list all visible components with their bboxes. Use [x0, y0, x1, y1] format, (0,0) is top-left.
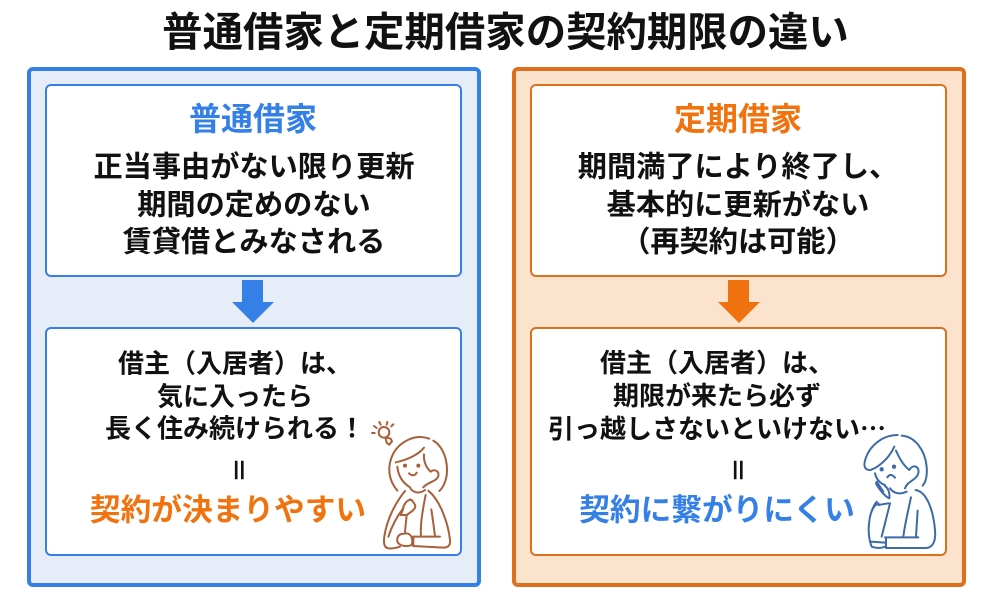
symbol: equals: ＝: [221, 456, 258, 483]
text: ordinary lease conclusion: 契約が決まりやすい: [90, 493, 366, 528]
title: 普通借家と定期借家の契約期限の違い: [162, 8, 849, 54]
text: ordinary lease tenant: 借主（入居者）は、: [118, 348, 352, 378]
text: ordinary lease definition: [93, 151, 415, 259]
text: ordinary lease tenant: [105, 348, 365, 443]
heading: fixed-term lease: 定期借家: [674, 101, 802, 137]
text: fixed-term definition: 基本的に更新がない: [607, 189, 869, 221]
text: fixed-term tenant: 引っ越しさないといけない…: [548, 409, 886, 446]
heading: ordinary lease: 普通借家: [189, 101, 317, 137]
box: ordinary lease definition: [45, 84, 462, 277]
text: ordinary lease tenant: 気に入ったら: [157, 381, 313, 411]
box: ordinary lease result: [45, 327, 462, 556]
text: fixed-term tenant: [548, 348, 886, 446]
text: fixed-term definition: [578, 151, 898, 259]
box: fixed-term definition: [530, 84, 947, 277]
text: fixed-term conclusion: 契約に繋がりにくい: [579, 493, 855, 528]
symbol: equals: ＝: [720, 456, 757, 483]
text: fixed-term tenant: 期限が来たら必ず: [613, 380, 821, 410]
text: ordinary lease definition: 正当事由がない限り更新: [93, 151, 415, 183]
text: fixed-term definition: （再契約は可能）: [621, 227, 855, 259]
panel: ordinary lease: [27, 67, 481, 587]
text: fixed-term tenant: 借主（入居者）は、: [600, 348, 834, 378]
panel: fixed-term lease: [512, 67, 966, 587]
box: fixed-term result: [530, 327, 947, 556]
text: ordinary lease definition: 賃貸借とみなされる: [123, 227, 385, 259]
text: ordinary lease definition: 期間の定めのない: [137, 189, 371, 221]
text: fixed-term definition: 期間満了により終了し、: [578, 151, 898, 183]
text: ordinary lease tenant: 長く住み続けられる！: [105, 413, 365, 443]
